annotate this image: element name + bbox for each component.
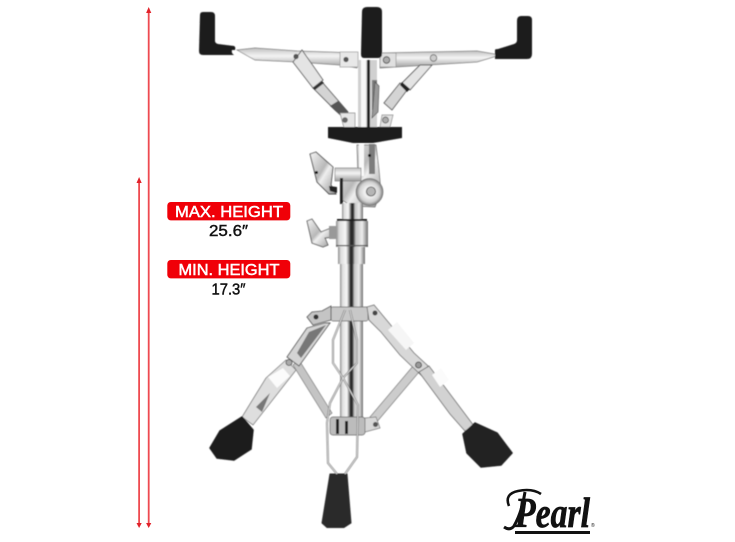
label: max height: 25.6″ — [209, 223, 249, 240]
basket arms — [237, 48, 500, 117]
clamp and lock knob — [310, 144, 383, 207]
tripod collars — [330, 307, 380, 435]
right leg — [367, 305, 474, 431]
wire linkage — [327, 310, 358, 474]
label: min height — [167, 260, 290, 298]
logo: Pearl: ® — [591, 522, 595, 529]
left leg — [242, 306, 331, 425]
rubber foot: right — [463, 423, 512, 467]
rubber pad: right — [495, 16, 532, 59]
snare stand illustration — [199, 7, 532, 528]
wing nut — [307, 219, 337, 247]
label: min height: MIN. HEIGHT — [178, 262, 280, 279]
rubber foot: left — [210, 417, 253, 460]
tripod braces — [293, 360, 419, 424]
arrow: max height dimension — [146, 7, 151, 528]
rubber pad: left — [199, 12, 235, 55]
label: max height — [167, 202, 290, 240]
height-lock block — [328, 127, 402, 143]
main tube — [336, 203, 368, 424]
rubber foot: center — [322, 474, 351, 528]
logo: Pearl: Pearl — [514, 491, 590, 537]
rubber pad: center — [361, 7, 382, 58]
arrow: min height dimension — [137, 177, 142, 528]
center column upper — [340, 60, 393, 128]
label: min height: 17.3″ — [212, 282, 246, 298]
label: max height: MAX. HEIGHT — [175, 204, 284, 221]
